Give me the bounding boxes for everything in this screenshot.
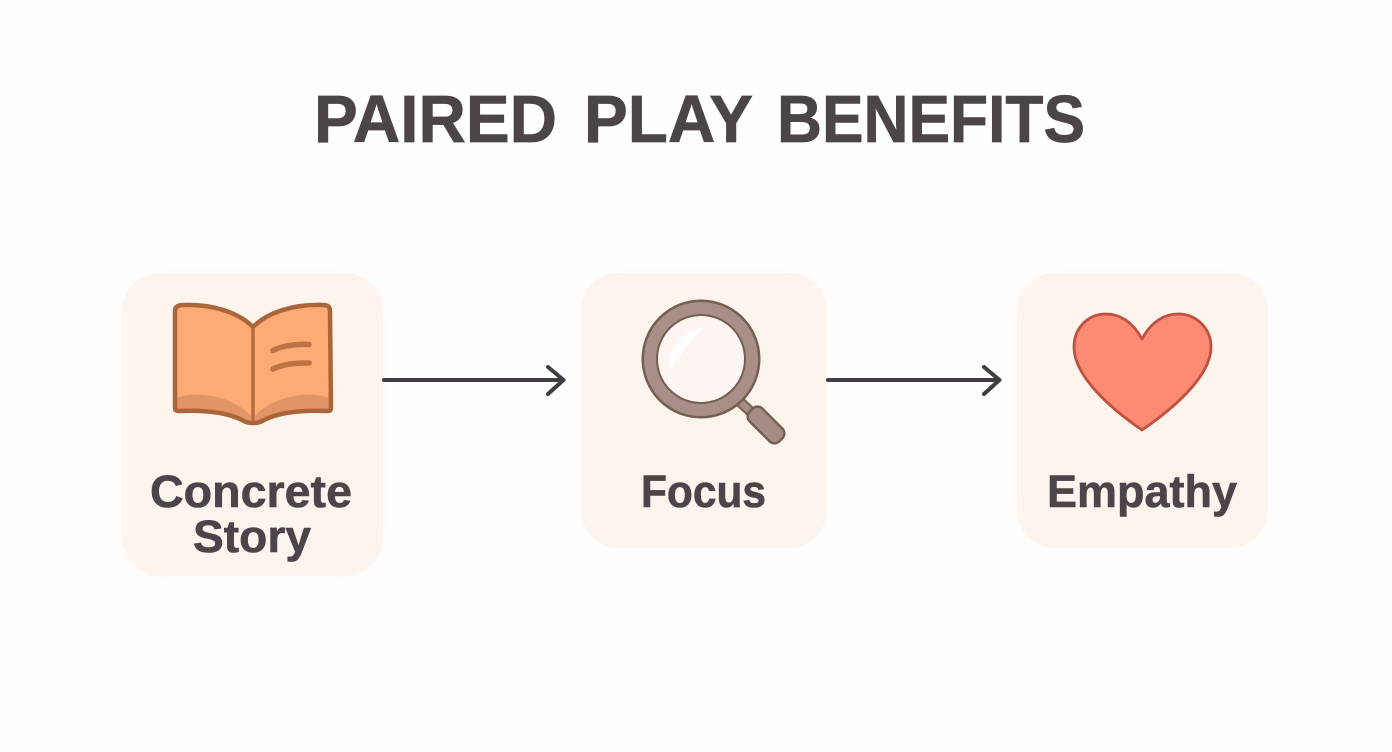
icon: open book: [175, 305, 331, 423]
icon: heart: [1074, 314, 1211, 430]
icon: magnifying glass: [650, 308, 787, 446]
panel: focus: [581, 273, 827, 548]
panel: empathy: [1017, 273, 1268, 548]
label: focus: Focus: [641, 466, 766, 517]
title: [314, 82, 1085, 157]
label: empathy: Empathy: [1047, 466, 1237, 517]
title: BENEFITS: [777, 82, 1085, 157]
arrow: story to focus: [384, 367, 564, 394]
panel: concrete story: [122, 273, 383, 576]
label: story: Story: [193, 511, 311, 562]
arrow: focus to empathy: [828, 367, 1000, 394]
title: PAIRED: [314, 82, 557, 157]
title: PLAY: [584, 82, 753, 157]
label: concrete: Concrete: [150, 466, 352, 517]
